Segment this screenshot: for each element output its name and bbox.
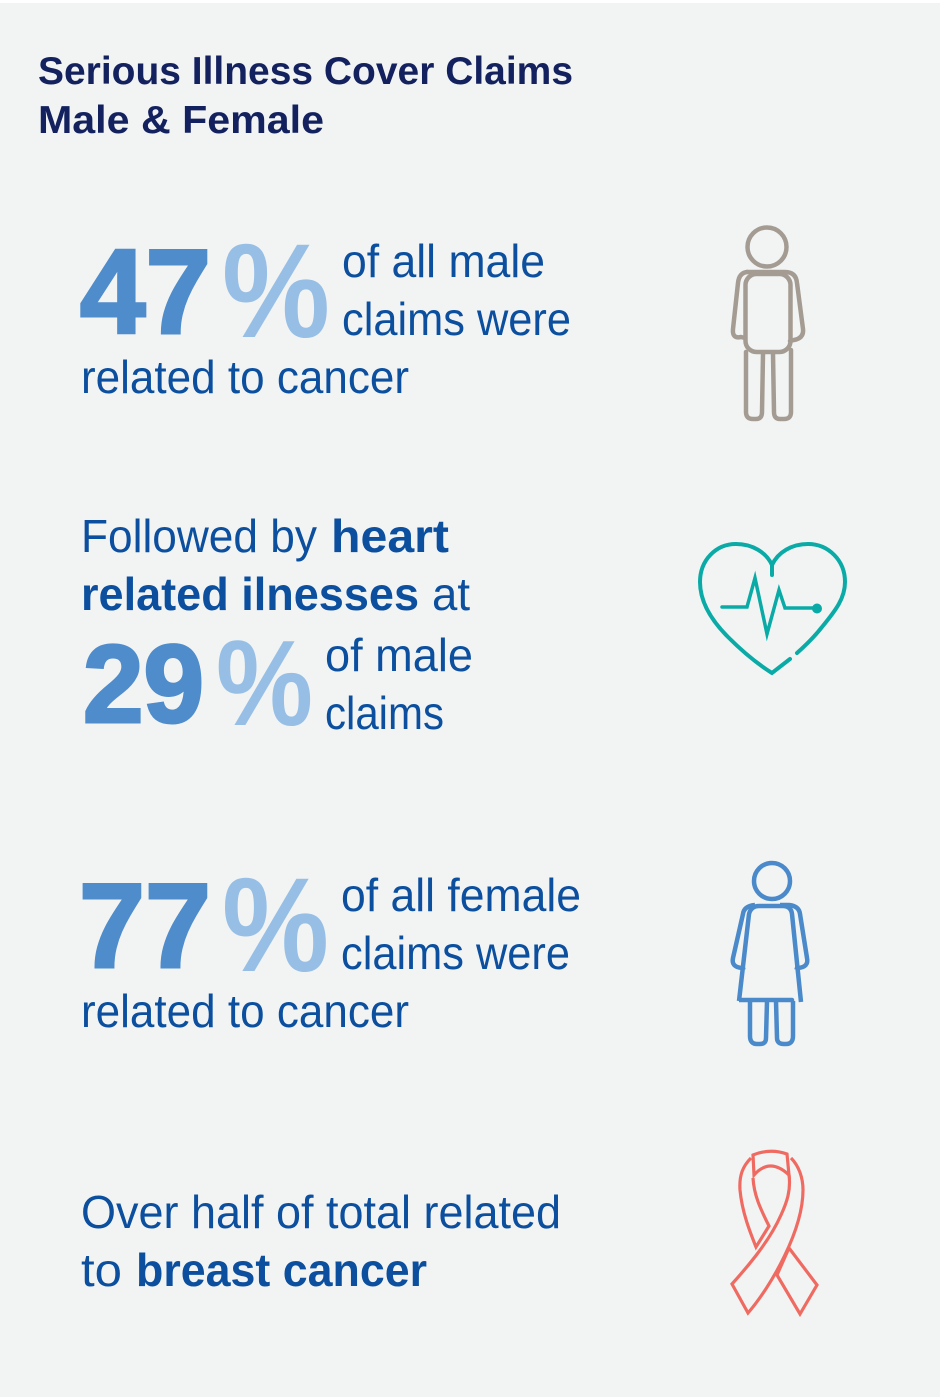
stat block: 77% female cancer: claims were (341, 927, 570, 979)
stat block: 47% male cancer: claims were (342, 293, 571, 345)
title: Male & Female (38, 99, 324, 142)
text block: heart related illnesses 29%: at (432, 568, 470, 620)
stat block: 77% female cancer: 77 (79, 859, 211, 993)
title (38, 50, 573, 142)
text block: heart related illnesses 29%: of male (325, 629, 473, 681)
stat block: 47% male cancer: related to cancer (81, 351, 409, 403)
text block: heart related illnesses 29%: claims (325, 687, 444, 739)
text block: breast cancer: to (81, 1244, 122, 1296)
stat block: 77% female cancer (79, 851, 581, 1037)
text block: breast cancer (81, 1186, 561, 1296)
stat block: 77% female cancer: related to cancer (81, 985, 409, 1037)
stat block: 47% male cancer: 47 (80, 225, 211, 359)
text block: heart related illnesses 29%: Followed by (81, 510, 317, 562)
text block: heart related illnesses 29%: related ilnesses (81, 568, 419, 620)
text block: heart related illnesses 29%: % (216, 615, 313, 751)
text block: heart related illnesses 29%: 29 (83, 623, 204, 746)
text block: breast cancer: breast cancer (136, 1244, 427, 1296)
text block: heart related illnesses 29%: heart (331, 510, 449, 562)
text block: breast cancer: Over half of total related (81, 1186, 561, 1238)
stat block: 47% male cancer: % (222, 217, 330, 366)
title: Serious Illness Cover Claims (38, 50, 573, 93)
icon: woman (733, 863, 807, 1044)
stat block: 77% female cancer: of all female (341, 869, 581, 921)
stat block: 47% male cancer: of all male (342, 235, 545, 287)
icon: man (733, 228, 803, 419)
icon: heart with pulse (700, 544, 845, 673)
icon: awareness ribbon (732, 1151, 817, 1314)
text block: heart related illnesses 29% (81, 510, 473, 751)
stat block: 77% female cancer: % (222, 851, 329, 1000)
stat block: 47% male cancer (80, 217, 571, 403)
